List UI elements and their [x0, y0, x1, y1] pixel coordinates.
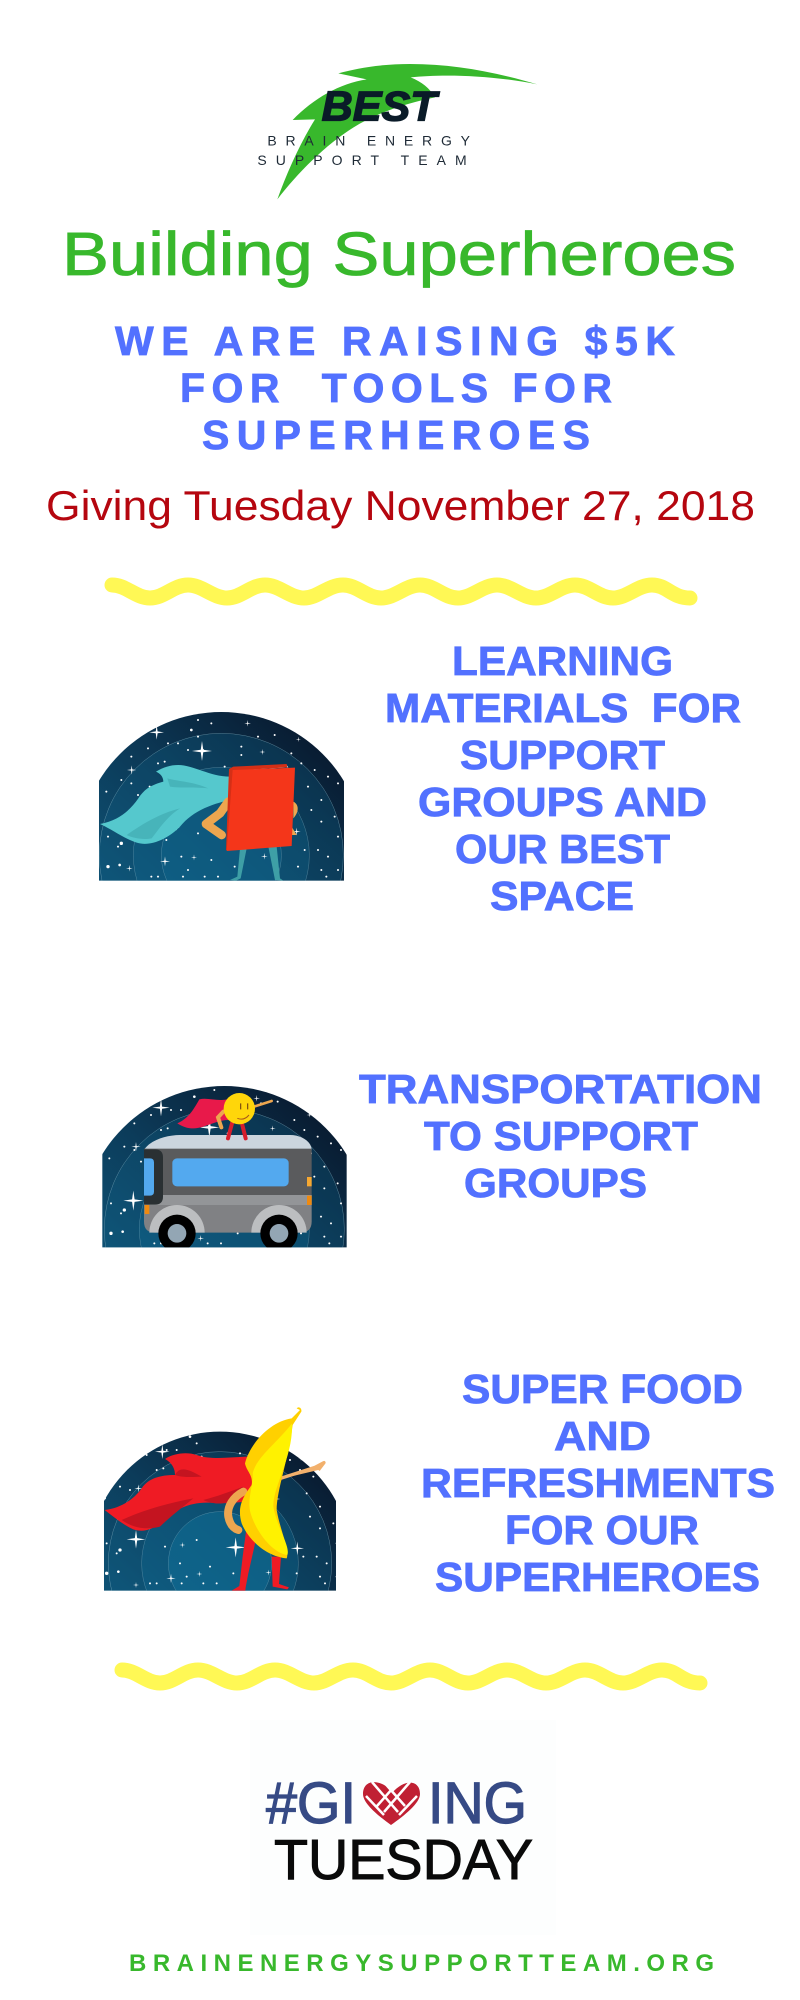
fundraising heading: FOR TOOLS FOR [180, 365, 612, 411]
section 1 text: learning materials: SPACE [490, 873, 634, 919]
section 2 text: transportation: TRANSPORTATION [359, 1066, 762, 1112]
section 3 text: super food: FOR OUR [505, 1507, 699, 1553]
section 2 text: transportation [359, 1066, 762, 1206]
cape [105, 1453, 282, 1531]
section 1 text: learning materials: GROUPS AND [418, 779, 707, 825]
section 3 text: super food [421, 1366, 775, 1600]
section 3 text: super food: REFRESHMENTS [421, 1460, 775, 1506]
fundraising heading: WE ARE RAISING $5K [115, 318, 675, 364]
bus [144, 1135, 312, 1252]
illustration: banana superhero [104, 1407, 336, 1591]
logo text: #GI: #GI [266, 1771, 356, 1836]
section 1 text: learning materials: MATERIALS FOR [385, 685, 741, 731]
logo text: TUESDAY: TUESDAY [274, 1828, 533, 1892]
banana [240, 1407, 301, 1558]
section 1 text: learning materials: SUPPORT [460, 732, 665, 778]
section 3 text: super food: AND [554, 1413, 651, 1459]
section 3 text: super food: SUPERHEROES [435, 1554, 760, 1600]
wave divider bottom [122, 1670, 700, 1683]
section 2 text: transportation: TO SUPPORT [424, 1113, 698, 1159]
section 2 text: transportation: GROUPS [464, 1160, 647, 1206]
legs [230, 847, 283, 881]
hero on roof [177, 1093, 272, 1138]
logo tagline line 2: SUPPORT TEAM [257, 152, 467, 168]
logo: Brain Energy Support Team [257, 64, 537, 199]
arm [206, 802, 228, 835]
illustration: superhero on bus [102, 1086, 347, 1248]
title: Building Superheroes [62, 220, 736, 288]
section 1 text: learning materials: OUR BEST [455, 826, 670, 872]
icon: heart [363, 1780, 420, 1825]
website footer: BRAINENERGYSUPPORTTEAM.ORG [129, 1950, 714, 1977]
section 1 text: learning materials [385, 638, 741, 919]
book [229, 765, 288, 771]
section 1 text: learning materials: LEARNING [452, 638, 673, 684]
fundraising heading [115, 318, 675, 458]
date line: Giving Tuesday November 27, 2018 [46, 482, 755, 529]
cape [100, 765, 237, 844]
logo: Giving Tuesday [250, 1720, 556, 1935]
icon: green lightning bolt [277, 64, 537, 199]
logo wordmark: BEST [322, 83, 441, 129]
arms and legs [273, 1463, 324, 1481]
fundraising heading: SUPERHEROES [202, 412, 590, 458]
section 3 text: super food: SUPER FOOD [462, 1366, 743, 1412]
illustration: flying book superhero [99, 712, 344, 881]
logo text: ING: ING [428, 1771, 527, 1836]
logo tagline line 1: BRAIN ENERGY [267, 133, 471, 149]
wave divider top [112, 585, 690, 598]
